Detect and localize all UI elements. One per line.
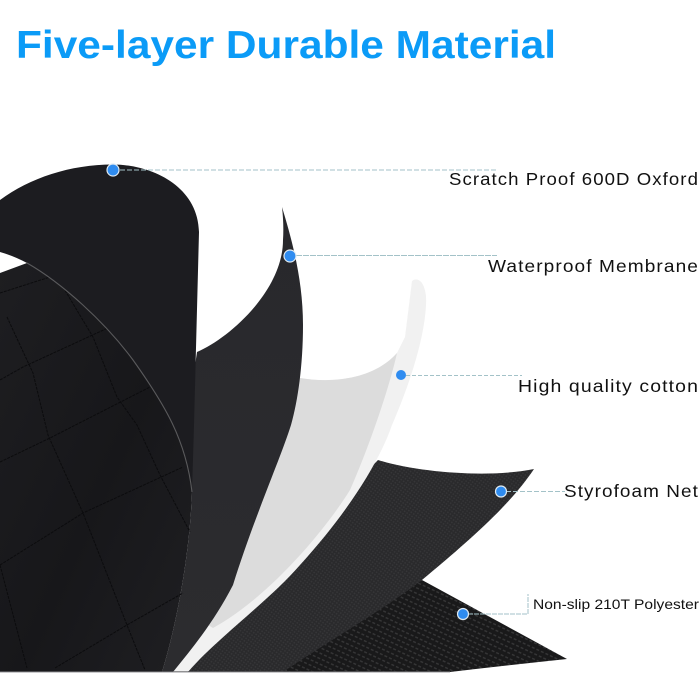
oxford grey edge <box>27 263 192 492</box>
layer 1: scratch proof oxford <box>0 164 199 492</box>
marker: waterproof <box>284 250 296 262</box>
layer 2: waterproof membrane <box>162 207 303 672</box>
bottom edge <box>0 671 450 672</box>
label line: polyester <box>468 594 528 614</box>
label: styrofoam net: Styrofoam Net <box>564 481 699 501</box>
cotton grey inner face <box>200 353 397 628</box>
label line: scratch proof <box>120 169 497 171</box>
label line: styrofoam net <box>506 490 565 492</box>
oxford panel <box>0 164 199 492</box>
label line: waterproof <box>296 254 497 256</box>
marker: scratch proof <box>107 164 119 176</box>
layer 4: styrofoam net <box>185 460 534 672</box>
layer 3: white cotton <box>170 279 426 672</box>
cotton rim <box>170 279 426 672</box>
label: cotton: High quality cotton <box>518 376 699 396</box>
layer 0: quilted lining <box>0 250 192 672</box>
marker: styrofoam net <box>496 486 506 497</box>
label: polyester: Non-slip 210T Polyester <box>533 596 699 612</box>
quilt stitching <box>0 277 190 670</box>
marker: cotton <box>396 370 406 380</box>
title: Five-layer Durable Material <box>16 24 556 67</box>
layer 5: non-slip polyester <box>275 580 567 672</box>
quilted panel <box>0 250 192 672</box>
marker: polyester <box>458 608 468 620</box>
label: waterproof: Waterproof Membrane <box>488 256 699 276</box>
label line: cotton <box>406 374 522 376</box>
label: scratch proof: Scratch Proof 600D Oxford <box>449 169 699 189</box>
